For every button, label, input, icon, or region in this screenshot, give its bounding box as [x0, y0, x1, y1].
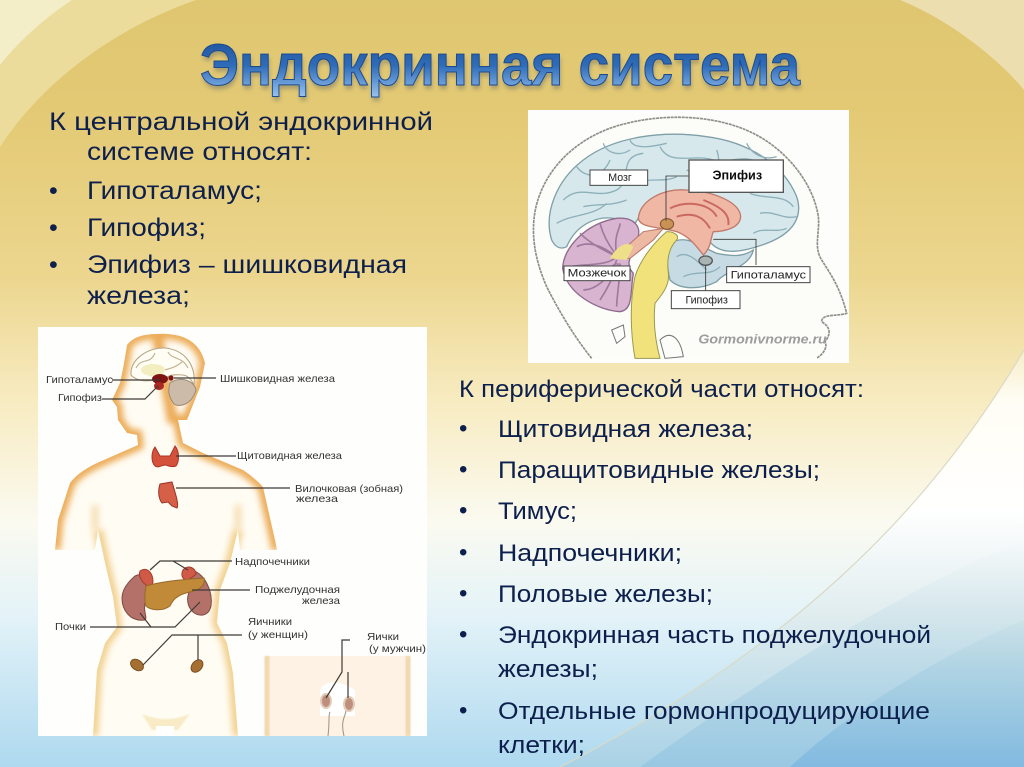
brain in head [131, 348, 196, 405]
text block: peripheral part: • [459, 697, 467, 724]
cerebrum [549, 134, 799, 251]
text block: peripheral part: Отдельные гормонпродуцирующие [498, 698, 930, 725]
body silhouette [55, 334, 277, 736]
text block: peripheral part: • [459, 415, 467, 442]
ovaries [130, 658, 204, 673]
text block: central endocrine system: • [49, 177, 58, 205]
body labels: (у мужчин) [369, 643, 426, 655]
watermark: Gormonivnorme.ru [698, 332, 827, 346]
text block: peripheral part: • [459, 580, 467, 607]
label: pituitary: Гипофиз [685, 294, 728, 306]
head outline [533, 117, 847, 358]
text block: peripheral part: клетки; [498, 732, 585, 759]
body labels: Яички [367, 631, 399, 643]
text block: peripheral part: • [459, 539, 467, 566]
text block: peripheral part: Эндокринная часть поджелудочной [498, 622, 931, 649]
text block: central endocrine system: Гипофиз; [87, 214, 206, 242]
body labels: Надпочечники [235, 556, 310, 568]
title: Эндокринная система [200, 33, 801, 98]
body labels: Гипоталамус [46, 374, 113, 386]
pituitary [699, 256, 712, 265]
text block: peripheral part: Надпочечники; [498, 540, 682, 567]
body labels: Яичники [248, 616, 292, 628]
text block: central endocrine system: Гипоталамус; [87, 177, 262, 205]
diagram: brain section [528, 110, 849, 363]
label: pineal gland: Эпифиз [713, 168, 762, 182]
body labels: Поджелудочная [255, 584, 340, 596]
body labels: железа [302, 595, 340, 607]
pituitary gland [154, 382, 164, 390]
male inset [265, 656, 410, 736]
pancreas [145, 578, 204, 610]
body labels: железа [296, 493, 338, 505]
hypothalamus gland [152, 374, 168, 384]
text block: peripheral part: • [459, 456, 467, 483]
text block: peripheral part [459, 376, 931, 759]
thyroid gland [152, 446, 178, 467]
text block: central endocrine system: • [49, 214, 58, 242]
leader lines [90, 378, 350, 698]
cerebellum [563, 218, 639, 312]
text block: central endocrine system: Эпифиз – шишковидная [87, 251, 407, 279]
text block: central endocrine system: • [49, 251, 58, 279]
diagram: human body endocrine glands [38, 327, 427, 736]
pineal gland [168, 375, 174, 381]
text block: peripheral part: Тимус; [498, 498, 577, 525]
text block: central endocrine system: системе относят: [87, 138, 312, 166]
text block: central endocrine system: К центральной эндокринной [49, 108, 433, 136]
label: brain [590, 170, 648, 185]
label: cerebellum: Мозжечок [568, 268, 627, 280]
body labels [46, 373, 426, 655]
label: brain: Мозг [608, 172, 632, 184]
title: Эндокринная система [201, 37, 802, 102]
body labels: Щитовидная железа [237, 450, 342, 462]
adrenal glands [139, 567, 196, 586]
limbic structures [638, 190, 741, 255]
temporal lobe [667, 240, 753, 288]
text block: peripheral part: Щитовидная железа; [498, 416, 753, 443]
body labels: Вилочковая (зобная) [295, 483, 403, 495]
body labels: Почки [55, 621, 86, 633]
label: hypothalamus [727, 267, 810, 283]
brainstem and spinal cord [631, 232, 678, 358]
text block: peripheral part: Половые железы; [498, 581, 713, 608]
body labels: Шишковидная железа [220, 373, 335, 385]
label: pineal gland [689, 160, 783, 192]
pineal gland [660, 219, 674, 229]
label: hypothalamus: Гипоталамус [731, 269, 807, 281]
text block: peripheral part: Паращитовидные железы; [498, 457, 820, 484]
text block: peripheral part: К периферической части относят: [459, 376, 864, 403]
body labels: Гипофиз [58, 392, 102, 404]
text block: peripheral part: железы; [498, 656, 598, 683]
text block: central endocrine system [49, 108, 433, 310]
kidneys [122, 570, 211, 620]
label: cerebellum [564, 266, 630, 281]
skull base bones [612, 325, 683, 358]
leader lines [666, 176, 756, 292]
thymus gland [159, 482, 178, 508]
text block: peripheral part: • [459, 497, 467, 524]
text block: central endocrine system: железа; [87, 282, 190, 310]
body labels: (у женщин) [248, 629, 308, 641]
label: pituitary [671, 291, 740, 309]
text block: peripheral part: • [459, 621, 467, 648]
